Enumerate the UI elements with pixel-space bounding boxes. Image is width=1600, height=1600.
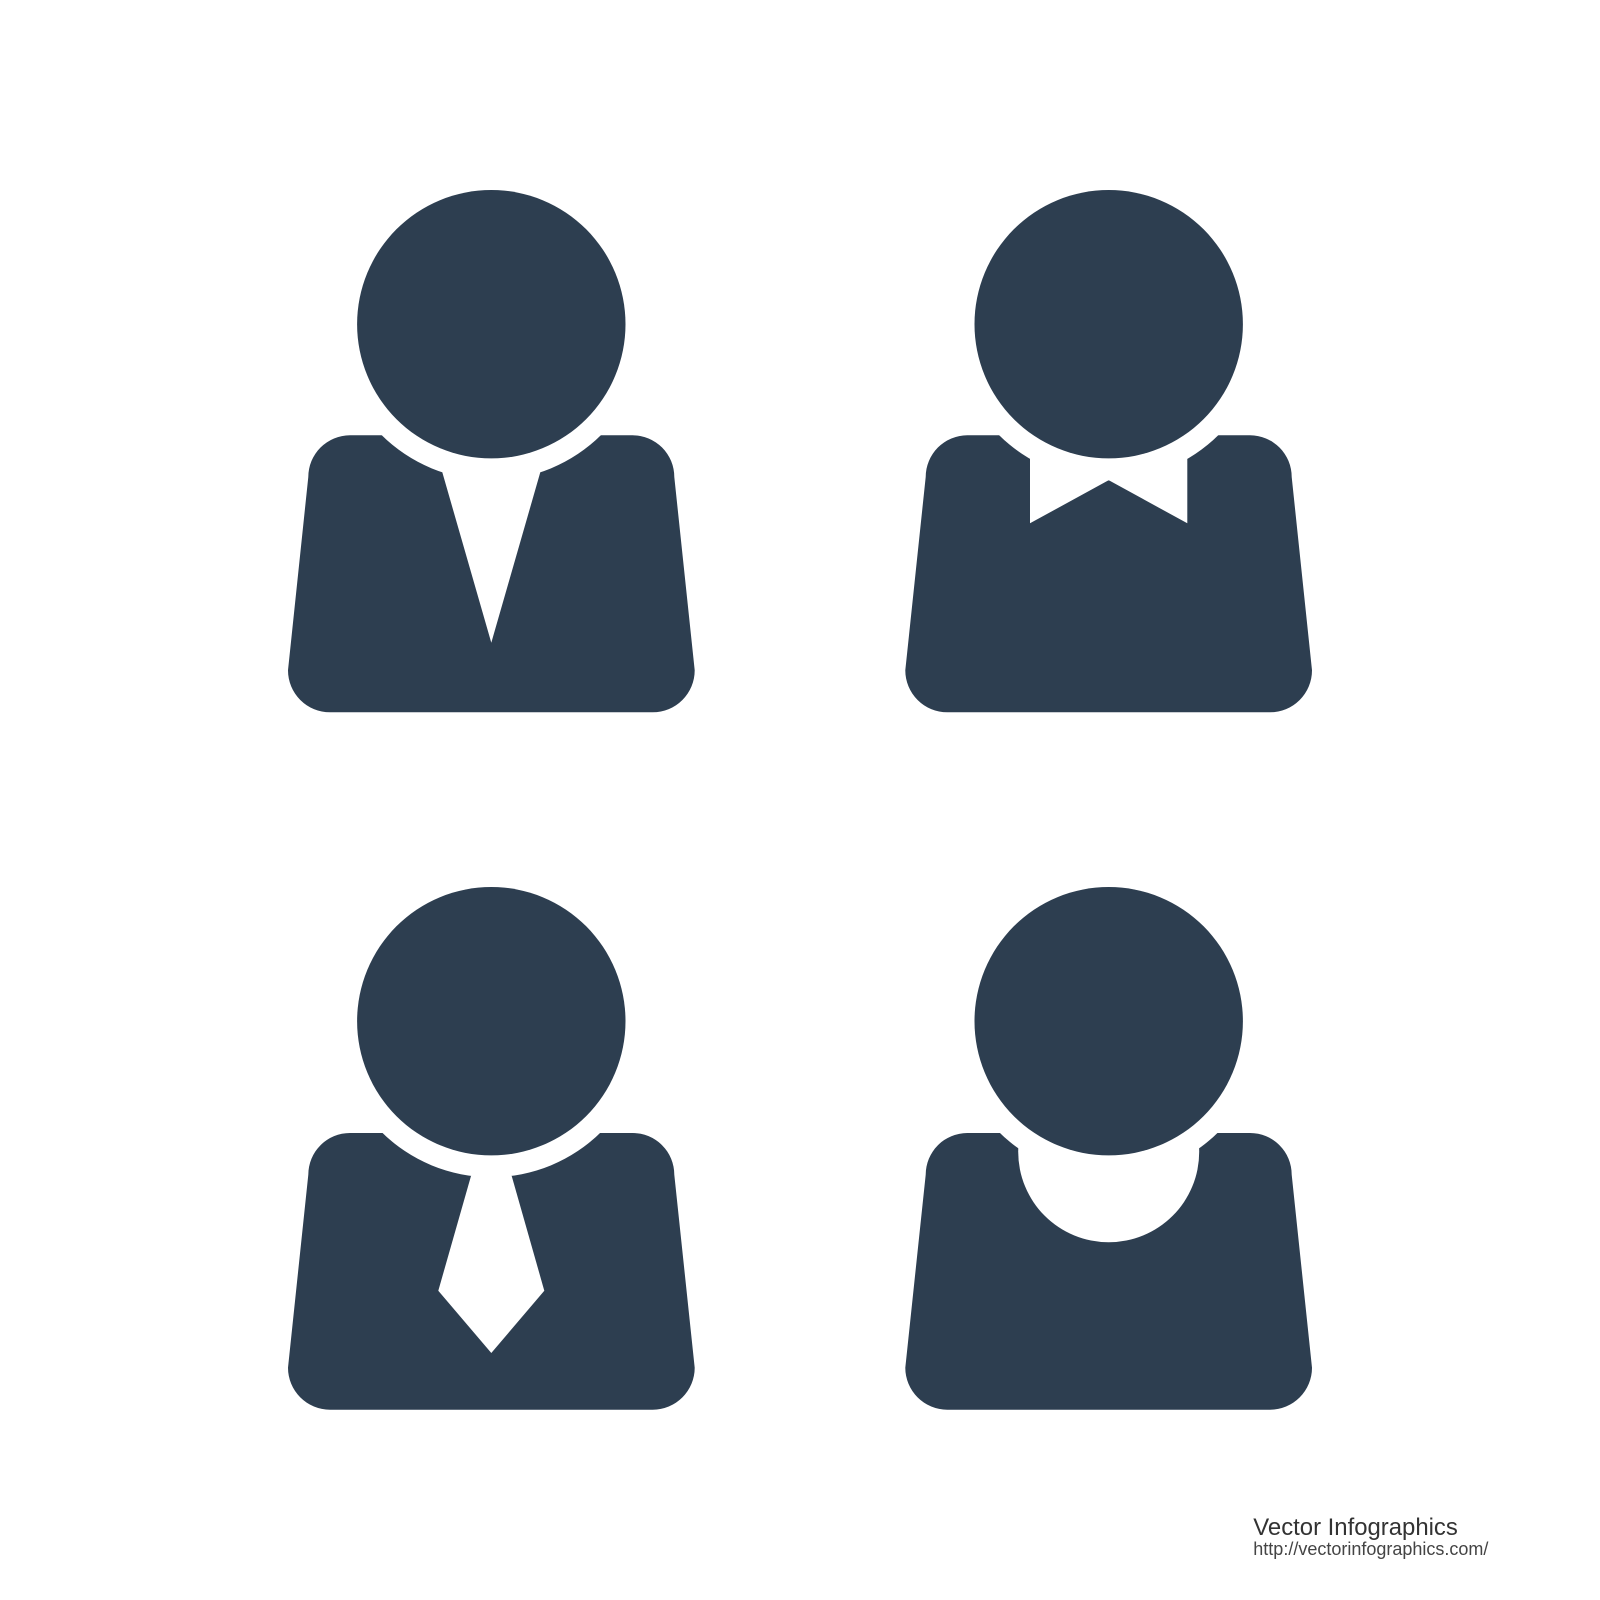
icon: person with bow collar [905, 168, 1312, 712]
credit text: Vector Infographics [1253, 1514, 1458, 1541]
icon: person with round neckline [905, 865, 1312, 1410]
credit text: http://vectorinfographics.com/ [1253, 1539, 1488, 1559]
credit text [1253, 1514, 1488, 1559]
icon: person with necktie [288, 865, 695, 1410]
icon: person with V-neck jacket [288, 168, 695, 712]
